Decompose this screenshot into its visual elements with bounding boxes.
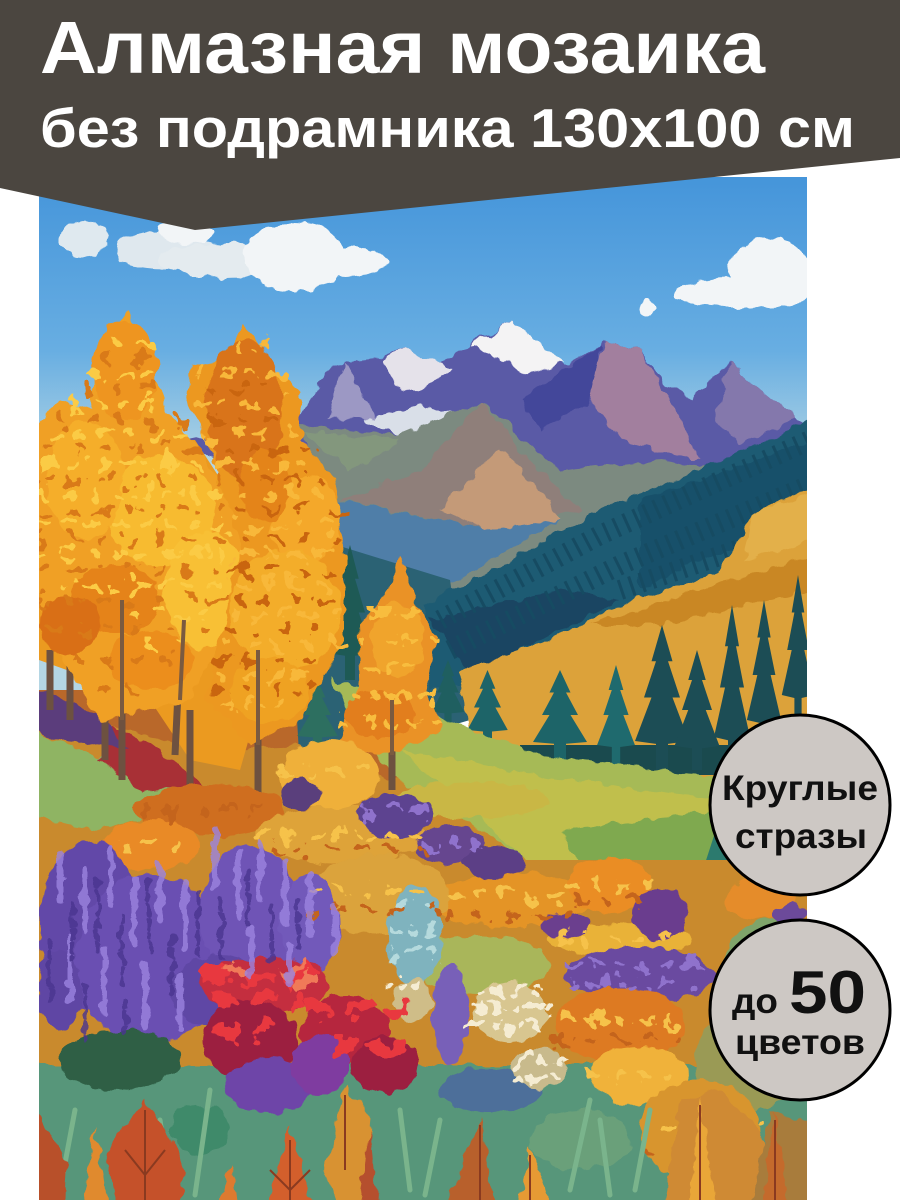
backing behind mid trees: [297, 547, 469, 748]
dark forest slope: [425, 418, 815, 690]
lower sky backing: [39, 467, 218, 690]
flower dabs: [120, 770, 770, 1150]
left tree brush dabs: [42, 345, 232, 690]
forest tree texture: [440, 440, 810, 650]
lavender spikes: [50, 830, 335, 1040]
coral petals: [230, 970, 350, 985]
left orange tree foliage: [30, 310, 245, 720]
thin trunk highlights: [122, 600, 392, 755]
title line 2: без подрамника 130х100 см: [40, 97, 855, 159]
header banner: [0, 0, 900, 230]
bands of yellow and orange: [280, 739, 380, 811]
panel: painting of autumn mountain landscape: [10, 177, 840, 1200]
right purple dabs: [365, 810, 705, 985]
tree trunks: [46, 650, 396, 792]
orange and yellow field dabs: [120, 770, 770, 1130]
leaf veins: [125, 1095, 775, 1200]
clouds: [60, 220, 820, 317]
badge: up to 50 colours: цветов: [735, 1023, 865, 1062]
central tree brush dabs: [195, 345, 342, 705]
red flowers: [200, 957, 330, 1013]
small tree brush dabs: [342, 612, 438, 724]
badge: up to 50 colours: 50: [789, 959, 866, 1026]
orange leaves: [30, 1085, 795, 1200]
title line 1: Алмазная мозаика: [40, 6, 766, 89]
badge: up to 50 colours: [710, 920, 890, 1100]
autumn trees: [30, 310, 442, 800]
red petals: [210, 975, 410, 1045]
badge: round rhinestones: стразы: [735, 817, 867, 856]
white petals: [395, 985, 575, 1078]
sky: [39, 177, 807, 467]
title: [40, 6, 855, 159]
grass blades: [60, 1090, 650, 1195]
foreground pine: [706, 836, 727, 860]
badge: up to 50 colours: до: [732, 982, 778, 1021]
dark orange field dabs: [140, 802, 681, 1156]
flower field: [38, 739, 820, 1180]
tall central tree foliage: [187, 322, 345, 745]
base of flower field: [525, 860, 746, 882]
pine row: [297, 545, 814, 775]
badge: round rhinestones: [710, 715, 890, 895]
mountains: [168, 322, 815, 480]
bottom foliage patches: [170, 1090, 830, 1200]
small tree foliage: [335, 556, 442, 755]
golden hill: [458, 485, 815, 780]
big lavender patch: [40, 840, 140, 1010]
valley foothills: [299, 403, 705, 588]
badge: round rhinestones: Круглые: [722, 769, 878, 808]
foliage backing between trees: [39, 440, 260, 770]
white flowers base: [474, 982, 546, 1042]
ground backing under trees: [39, 690, 398, 780]
purple patches: [280, 780, 320, 810]
orange clusters: [555, 987, 685, 1063]
green meadow: [331, 676, 714, 860]
pale blue plant: [387, 885, 443, 985]
pale blue plant dabs: [392, 905, 440, 955]
